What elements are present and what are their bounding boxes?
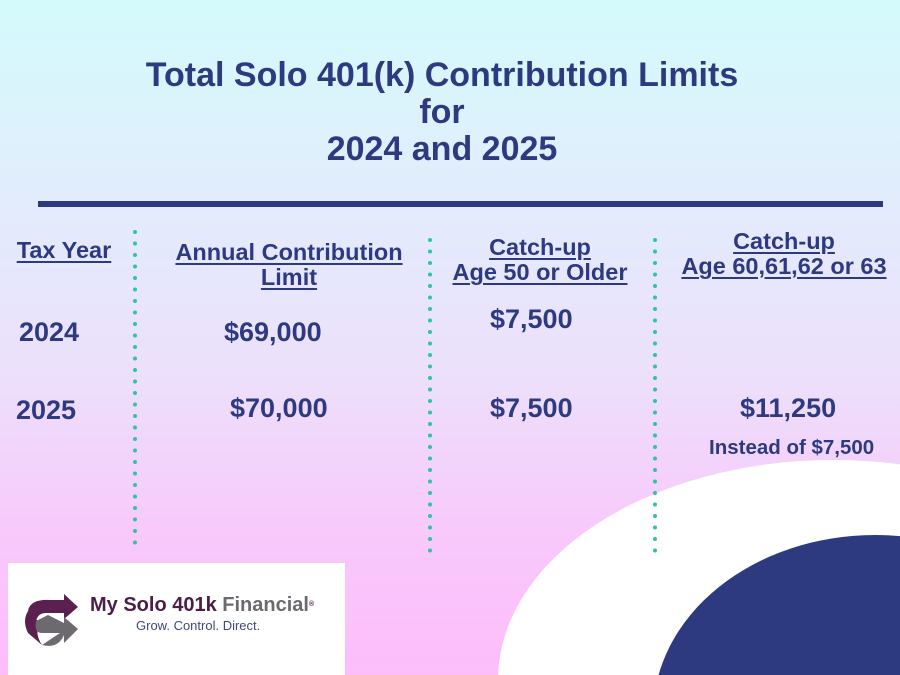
text: $7,500 — [490, 304, 573, 334]
header: catch-up 60-63 — [681, 228, 887, 279]
header: catch-up 60-63: Catch-up — [733, 228, 835, 254]
header: catch-up 50 — [452, 234, 628, 285]
logo text: My Solo 401k Financial® — [90, 594, 314, 616]
header: tax year: Tax Year — [17, 237, 111, 263]
title: Total Solo 401(k) Contribution Limits — [146, 56, 738, 94]
text: $7,500 — [490, 393, 573, 423]
row 2024: 2024 — [19, 317, 79, 347]
title: 2024 and 2025 — [327, 130, 557, 168]
header: annual limit: Limit — [261, 264, 317, 290]
note: Instead of $7,500 — [709, 436, 874, 459]
header: annual limit: Annual Contribution — [175, 239, 403, 265]
text: $11,250 — [740, 393, 836, 423]
text: $69,000 — [224, 317, 322, 347]
header: catch-up 60-63: Age 60,61,62 or 63 — [681, 253, 887, 279]
row 2025: 2025 — [16, 395, 76, 425]
tagline: Grow. Control. Direct. — [136, 618, 260, 633]
title: for — [419, 93, 465, 131]
title — [146, 56, 738, 168]
header: catch-up 50: Catch-up — [489, 234, 591, 260]
header: annual limit — [175, 239, 403, 290]
logo panel — [8, 563, 345, 675]
icon: arrows — [25, 594, 78, 646]
text: $70,000 — [230, 393, 328, 423]
header: catch-up 50: Age 50 or Older — [452, 259, 628, 285]
